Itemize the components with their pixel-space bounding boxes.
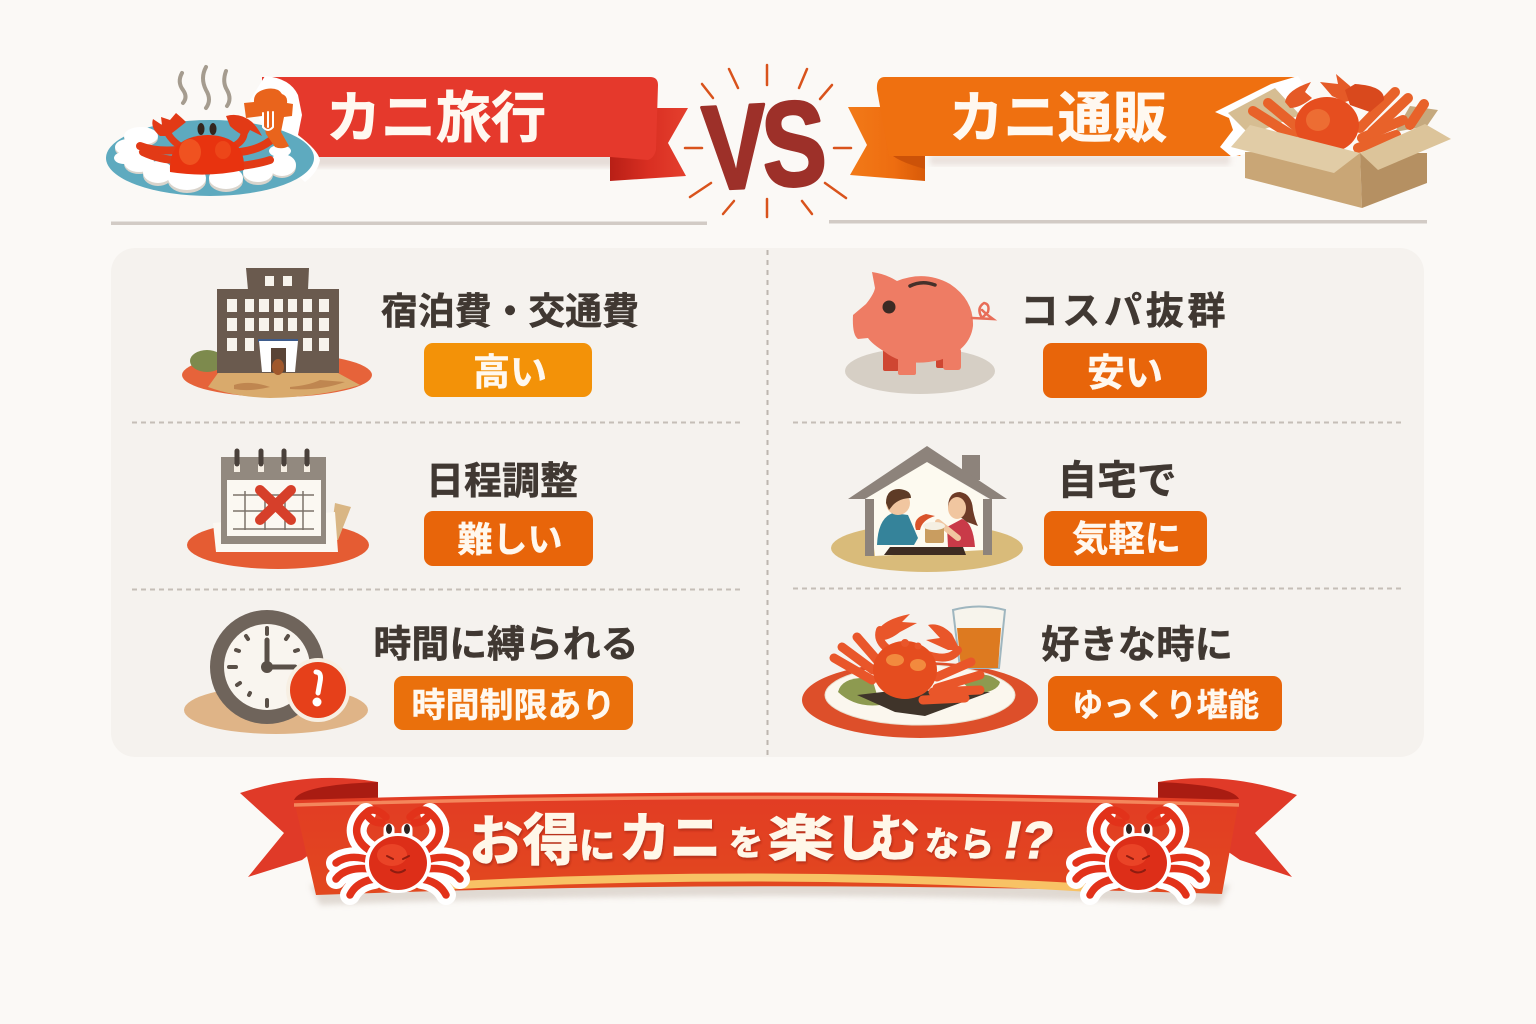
drink glass <box>953 606 1005 668</box>
left tail <box>240 778 378 877</box>
banner text: を <box>729 825 763 863</box>
bottom yellow stripe <box>440 877 1090 888</box>
white sticker outline <box>250 76 320 182</box>
icon: calendar with cross <box>187 451 369 569</box>
heading: 時間に縛られる <box>374 623 638 665</box>
crab box on table <box>925 527 944 543</box>
row: great value <box>845 272 1226 398</box>
left crab <box>336 810 460 895</box>
man <box>877 489 918 545</box>
row: bound by time <box>184 610 638 734</box>
banner text: お <box>469 812 523 872</box>
pill: leisurely enjoy <box>1048 676 1282 731</box>
pill: difficult: 難しい <box>457 521 563 560</box>
heading: 自宅で <box>1058 459 1176 503</box>
comparison panel background <box>111 248 1424 757</box>
ribbon body <box>262 77 658 160</box>
banner text <box>469 809 1053 872</box>
pill: high <box>424 343 592 397</box>
heading: 日程調整 <box>426 461 578 503</box>
crab claws <box>1285 74 1384 112</box>
pill: difficult <box>424 511 593 566</box>
icon: crab plate and drink <box>802 606 1038 738</box>
illustration: crab on ice plate <box>106 67 320 196</box>
heading: 好きな時に <box>1041 624 1233 667</box>
title text: カニ旅行 <box>326 87 546 149</box>
pill: cheap <box>1043 343 1207 398</box>
icon: hotel <box>182 268 372 398</box>
icon: couple in house <box>831 446 1023 572</box>
fork and chef hat icon <box>244 89 293 148</box>
illustration: crab in cardboard box <box>1215 74 1451 208</box>
pill: easily <box>1044 511 1207 566</box>
crab body <box>1295 97 1359 153</box>
title text: カニ通販 <box>949 87 1167 149</box>
pill: time limit <box>394 676 633 730</box>
crab <box>140 113 270 175</box>
heading: 宿泊費・交通費 <box>381 291 639 332</box>
ribbon shadow <box>930 155 1230 165</box>
ribbon fold <box>888 150 925 169</box>
ribbon body <box>877 77 1296 156</box>
row: accommodation and transport cost <box>182 268 639 398</box>
left fold <box>294 782 378 803</box>
box front flaps <box>1231 125 1360 173</box>
woman <box>938 492 978 547</box>
banner text: !? <box>1004 812 1053 870</box>
ribbon tail <box>610 108 688 181</box>
banner text: に <box>579 825 615 866</box>
top highlight stripe <box>294 798 1239 805</box>
pill: cheap: 安い <box>1087 353 1163 395</box>
pill: high: 高い <box>473 352 547 393</box>
icon: piggy bank <box>845 272 995 394</box>
VS rays <box>685 65 851 217</box>
row: casually at home <box>831 446 1207 572</box>
header divider left <box>111 222 707 225</box>
banner text: な <box>925 826 959 864</box>
banner text: カニ <box>619 809 721 869</box>
white sticker outline <box>1215 76 1310 157</box>
banner: カニ旅行 <box>262 77 688 181</box>
plate <box>106 120 314 196</box>
row divider 1 <box>132 422 1403 424</box>
plate <box>825 665 1015 725</box>
box sides <box>1245 152 1362 208</box>
right tail <box>1158 778 1297 877</box>
heading: コスパ抜群 <box>1020 291 1226 333</box>
table <box>884 547 966 555</box>
banner text: ら <box>960 826 994 864</box>
row divider 2 <box>132 588 1403 590</box>
icon: clock with alert <box>184 610 368 734</box>
pill: easily: 気軽に <box>1072 518 1181 559</box>
center vertical divider <box>766 250 768 757</box>
ribbon shadow <box>300 155 620 167</box>
crab legs <box>1253 92 1424 148</box>
banner text: しむ <box>834 811 920 867</box>
banner shadow <box>310 878 1230 905</box>
pill: time limit: 時間制限あり <box>412 687 616 725</box>
box back flaps <box>1228 88 1300 135</box>
ribbon tail <box>848 107 925 181</box>
right crab <box>1076 810 1200 895</box>
pill: leisurely enjoy: ゆっくり堪能 <box>1072 687 1259 723</box>
steam <box>180 67 230 108</box>
banner text: 得 <box>523 809 579 872</box>
banner: カニ通販 <box>848 77 1296 181</box>
ice stones <box>115 129 296 193</box>
VS emblem <box>685 65 851 217</box>
crab <box>834 614 980 700</box>
VS letters: VS <box>699 77 826 216</box>
row: schedule adjustment <box>187 451 593 569</box>
banner body <box>294 792 1239 895</box>
row: anytime you like <box>802 606 1282 738</box>
banner text: 楽 <box>768 811 834 867</box>
bottom banner <box>240 778 1297 905</box>
right fold <box>1158 782 1239 803</box>
header divider right <box>829 220 1427 224</box>
